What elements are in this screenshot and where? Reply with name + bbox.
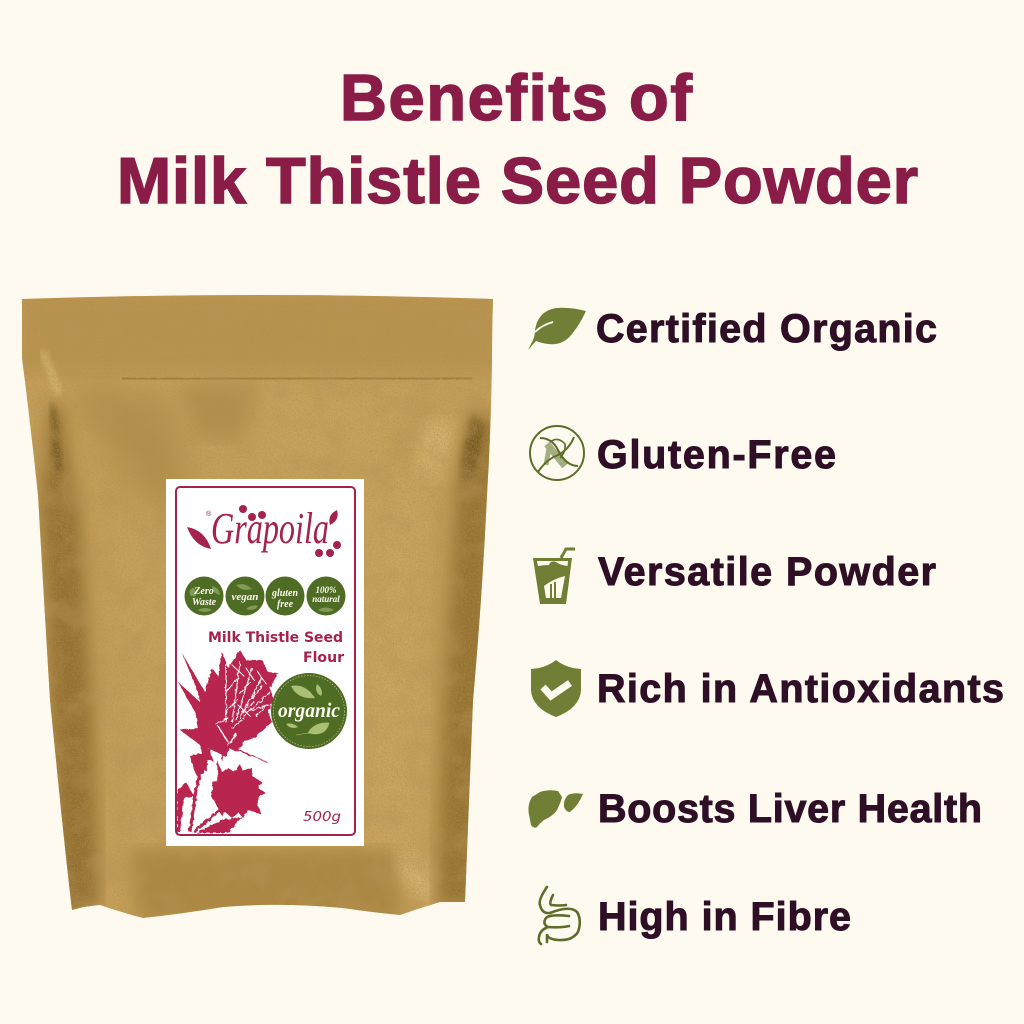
benefit: high in fibre: High in Fibre <box>598 895 851 939</box>
pouch paper <box>15 285 500 925</box>
title: Benefits of <box>340 61 692 134</box>
label border <box>176 487 355 835</box>
benefit: rich in antioxidants: Rich in Antioxidants <box>597 667 1004 711</box>
benefit: gluten-free: Gluten-Free <box>597 433 836 477</box>
certification badges: 100% <box>316 585 337 595</box>
benefit: certified organic: Certified Organic <box>596 307 937 351</box>
certification badges <box>184 576 346 616</box>
label sheet <box>166 479 364 846</box>
product name: Milk Thistle Seed <box>208 630 343 646</box>
zip seam <box>122 378 472 379</box>
benefit: gluten-free <box>530 426 836 480</box>
certification badges: free <box>277 599 294 610</box>
benefit: boosts liver health: Boosts Liver Health <box>598 787 982 831</box>
product name: Flour <box>303 650 345 666</box>
title: Milk Thistle Seed Powder <box>117 144 918 217</box>
stems and leaves <box>190 752 220 832</box>
thistle illustration <box>177 650 278 833</box>
pouch shading <box>20 290 500 920</box>
benefit: versatile powder: Versatile Powder <box>598 550 936 594</box>
certification badges: natural <box>312 594 340 604</box>
product name <box>208 630 345 666</box>
benefit: versatile powder <box>533 549 936 604</box>
certification badges: Waste <box>192 597 217 608</box>
large thistle head <box>178 650 278 762</box>
organic badge <box>271 673 347 749</box>
certification badges: vegan <box>232 591 258 603</box>
icon: leaf <box>528 308 586 350</box>
benefit: rich in antioxidants <box>531 660 1004 717</box>
brand logo <box>187 504 341 557</box>
organic badge: organic <box>278 698 341 722</box>
product pouch <box>15 285 500 925</box>
icon: shield with check <box>531 660 581 717</box>
brand logo: Grapoila <box>211 504 329 553</box>
icon: drink glass <box>533 549 575 604</box>
white hatching <box>216 662 272 746</box>
icon: liver <box>528 790 583 828</box>
icon: crossed wheat <box>530 426 584 480</box>
net weight: 500g <box>303 810 341 825</box>
small thistle head <box>211 760 266 818</box>
certification badges: gluten <box>271 588 298 599</box>
brand logo: ® <box>206 510 212 518</box>
paper grain <box>31 378 491 912</box>
benefit: high in fibre <box>539 887 851 944</box>
product label <box>166 479 364 846</box>
icon: intestines <box>539 887 580 944</box>
title <box>117 61 918 217</box>
certification badges: Zero <box>193 586 214 597</box>
